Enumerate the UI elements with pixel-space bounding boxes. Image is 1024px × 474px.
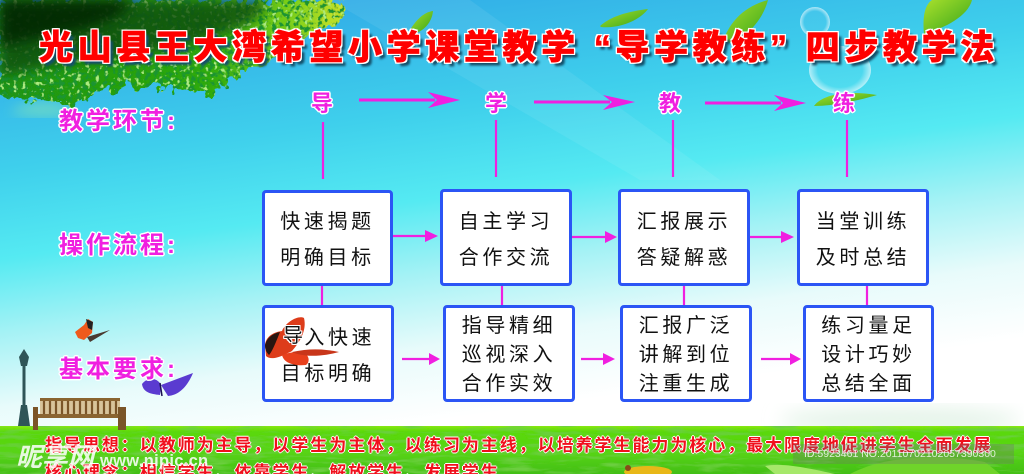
grass plants: sunflowers and large leaves [624,457,1000,474]
requirement box 2: 合作实效 [462,373,556,395]
process box 4: 及时总结 [816,246,910,268]
requirement box 4 [803,305,934,402]
bubbles [800,7,871,94]
image id stamp [793,444,1014,464]
process box 3: 汇报展示 [637,210,731,232]
step: learn: 学 [485,91,507,116]
butterfly: orange [75,319,110,342]
tree canopy [0,0,346,116]
watermark: 昵享网 www.nipic.cn [16,442,208,472]
row label: basic requirements: 基本要求: [59,356,178,383]
requirement box 1 [262,305,394,402]
process box 4: 当堂训练 [816,210,910,232]
image id stamp: ID:5923461 NO:20110702102057390300 [804,448,996,460]
process box 1: 快速揭题 [280,211,375,233]
requirement box 2: 指导精细 [462,315,556,337]
light rays [330,0,720,180]
step: teach: 教 [659,91,681,116]
step: practice: 练 [833,91,855,116]
requirement box 4: 总结全面 [821,373,916,395]
leaves [410,0,972,106]
requirement box 3 [620,305,752,402]
lamp post [18,349,30,426]
step: guide: 导 [311,91,333,116]
requirement box 3: 汇报广泛 [639,315,733,337]
overlapping character on butterfly: 导 [283,325,303,347]
guiding idea line: 指导思想：以教师为主导，以学生为主体，以练习为主线，以培养学生能力为核心，最大限度地促进学生全面发展 [45,436,992,455]
process box 4 [797,189,929,286]
process box 3 [618,189,750,286]
grass [0,426,1024,474]
process box 2 [440,189,572,286]
soft cloud above the grass [780,406,1020,434]
process box 1 [262,190,393,286]
requirement box 2: 巡视深入 [462,344,556,366]
requirement box 3: 讲解到位 [639,344,733,366]
requirement box 4: 设计巧妙 [821,344,916,366]
process box 3: 答疑解惑 [637,246,731,268]
requirement box 1: 导入快速 [281,326,375,348]
row label: teaching stages: 教学环节: [59,108,178,135]
process box 1: 明确目标 [280,247,375,269]
connectors and arrows [322,92,867,365]
requirement box 4: 练习量足 [821,315,916,337]
title: 光山县王大湾希望小学课堂教学 “导学教练” 四步教学法 [39,29,999,67]
process box 2: 合作交流 [459,246,553,268]
requirement box 3: 注重生成 [639,373,733,395]
bench [33,398,126,430]
butterfly: blue [142,373,193,396]
row label: operating process: 操作流程: [59,232,178,259]
requirement box 2 [443,305,575,402]
process box 2: 自主学习 [459,210,553,232]
requirement box 1: 目标明确 [281,362,375,384]
